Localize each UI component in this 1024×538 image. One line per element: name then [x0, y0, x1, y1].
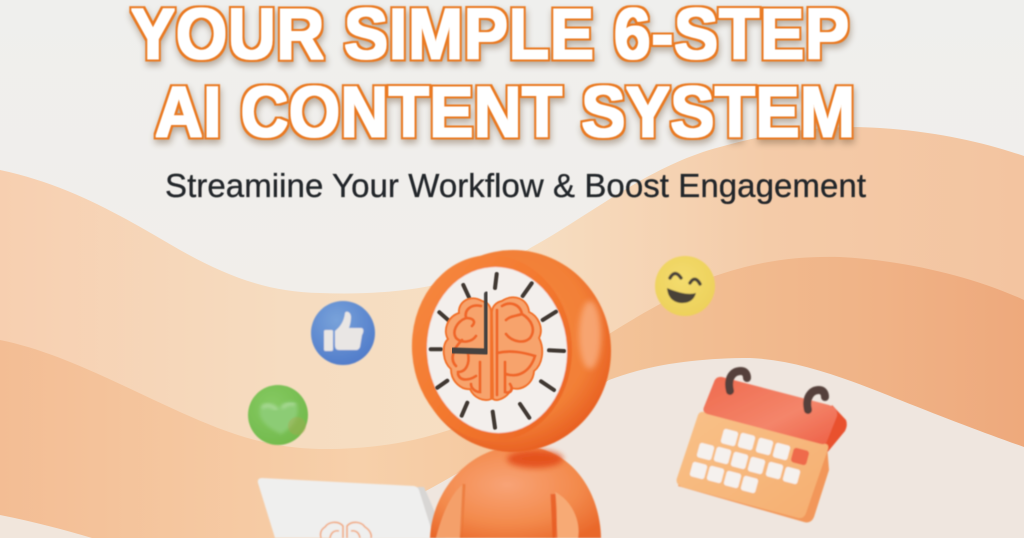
- pale bottom-left corner: [0, 515, 92, 538]
- clock hands: [453, 294, 486, 352]
- upper peach wave: [0, 127, 1024, 538]
- calendar header: [703, 377, 837, 444]
- clock tick marks: [431, 274, 564, 428]
- laptop: [258, 478, 446, 538]
- calendar binder rings: [729, 371, 825, 410]
- calendar highlighted date: [790, 447, 810, 466]
- calendar back page: [820, 405, 847, 454]
- icon: calendar: [677, 371, 847, 522]
- icon: blue thumbs-up badge: [311, 301, 375, 365]
- character: [406, 250, 611, 538]
- calendar body: [677, 412, 828, 518]
- pale bottom wave: [330, 358, 1024, 538]
- character clock head: [406, 250, 611, 452]
- icon: green heart badge: [248, 385, 308, 445]
- calendar shadow edge: [678, 416, 829, 522]
- calendar date squares: [689, 428, 801, 494]
- character body: [430, 446, 601, 538]
- lower orange wave: [0, 257, 1024, 538]
- laptop brain logo: [320, 522, 371, 538]
- subtitle: Streamiine Your Workflow & Boost Engagement: [165, 167, 866, 204]
- brain on clock face: [444, 297, 542, 400]
- icon: laughing emoji: [655, 256, 715, 316]
- title: [131, 0, 855, 152]
- title line 2: AI CONTENT SYSTEM: [155, 72, 855, 152]
